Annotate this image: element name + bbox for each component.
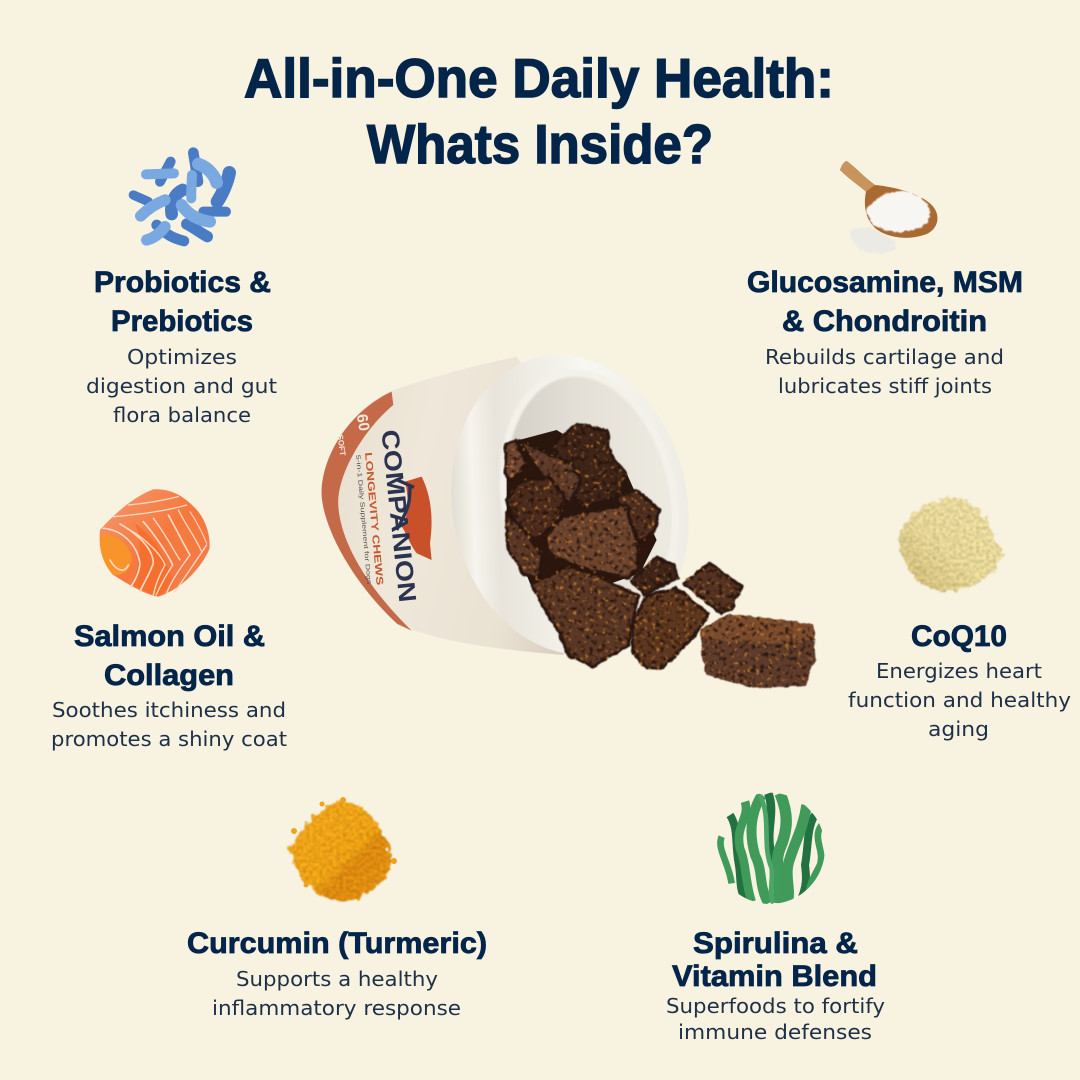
icon: salmon fillet [100,489,210,597]
description [848,659,1071,741]
label text: LONGEVITY CHEWS [362,452,385,586]
heading [747,266,1023,338]
description: Soothes itchiness and [52,698,286,722]
heading: Spirulina & [693,927,858,960]
chews [505,423,814,687]
product: jar spilling chews [322,335,814,687]
panel: salmon oil and collagen [51,489,287,751]
heading: Prebiotics [111,305,253,338]
jar body [322,357,610,655]
description: promotes a shiny coat [51,727,287,751]
description: digestion and gut [86,374,277,398]
heading: & Chondroitin [782,305,987,338]
jar opening [482,358,696,642]
icon: turmeric powder [290,797,397,902]
description: Rebuilds cartilage and [765,345,1004,369]
heading [94,266,271,338]
panel: probiotics and prebiotics [86,153,277,427]
label text: COMPANION [375,428,420,604]
panel: spirulina and vitamin blend [666,793,885,1044]
description [212,967,461,1020]
heading: Collagen [104,659,234,692]
description [765,345,1004,398]
icon: green seaweed [720,793,822,903]
label text: 5-in-1 Daily Supplement for Dogs [354,455,372,585]
description [666,994,885,1044]
description: flora balance [113,403,251,427]
dark interior [507,430,657,600]
heading [672,927,877,993]
heading: Salmon Oil & [74,620,265,653]
panel: glucosamine, MSM and chondroitin [747,161,1023,398]
description: immune defenses [678,1020,872,1044]
panel: CoQ10 [848,497,1071,741]
icon: pale yellow powder [899,497,1002,592]
icon: blue bacteria [133,153,229,241]
description [86,345,277,427]
description: Supports a healthy [236,967,438,991]
label text [335,413,420,604]
heading: Curcumin (Turmeric) [187,927,487,960]
heading: Probiotics & [94,266,271,299]
heading: CoQ10 [911,620,1007,653]
heading [74,620,265,692]
description: Optimizes [127,345,237,369]
description: Energizes heart [876,659,1042,683]
label text: 60 [353,413,372,432]
heading: Vitamin Blend [672,960,877,993]
description: inflammatory response [212,996,461,1020]
title: All-in-One Daily Health: [244,47,834,109]
logo: dog [397,477,432,560]
label text: SOFT [335,434,347,456]
panel: curcumin [187,797,487,1020]
description: function and healthy [848,688,1071,712]
label band [322,392,412,631]
description: aging [928,717,989,741]
description: Superfoods to fortify [666,994,885,1018]
jar rim [426,335,714,675]
title [244,47,834,175]
heading: Glucosamine, MSM [747,266,1023,299]
description [51,698,287,751]
description: lubricates stiff joints [778,374,992,398]
icon: wooden spoon with white powder [840,161,937,254]
title: Whats Inside? [367,113,713,175]
